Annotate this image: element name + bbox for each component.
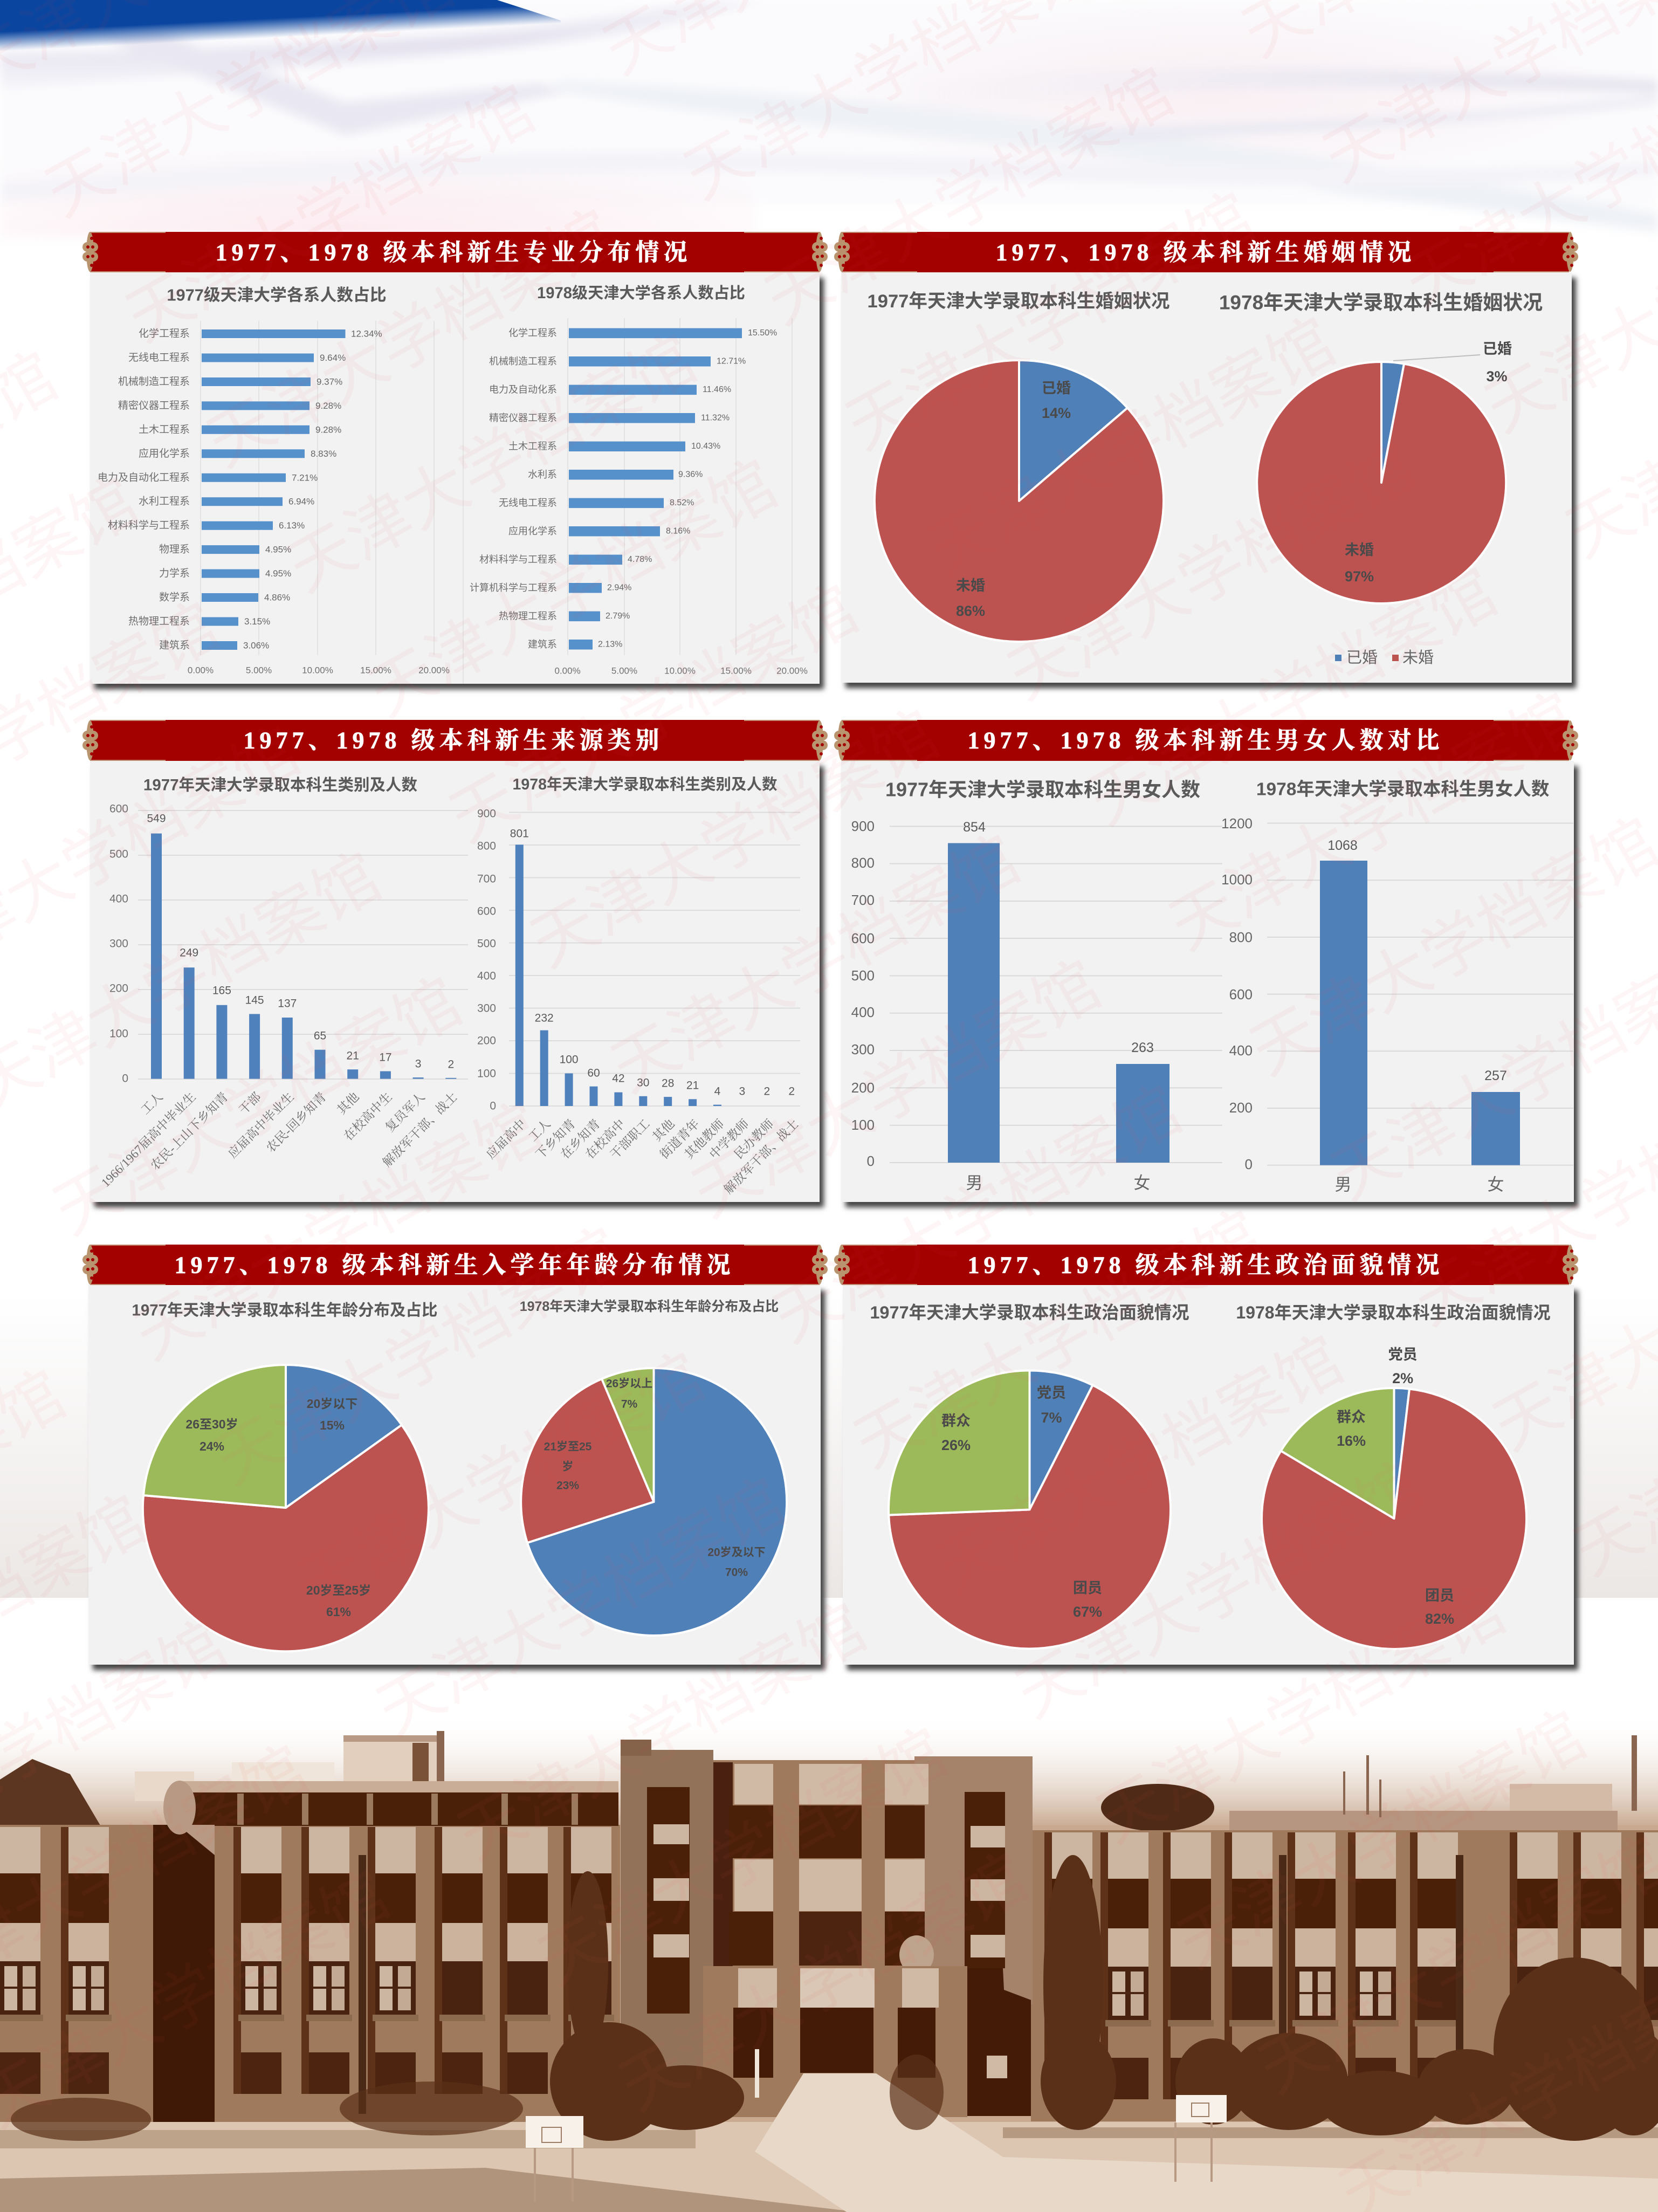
chart: 1977 departments: 应用化学系	[139, 448, 190, 459]
heading: major distribution	[82, 232, 828, 272]
chart: 1978 source columns: 21	[686, 1080, 699, 1091]
chart: 1977 source columns: 1966/1967届高中毕业生	[99, 1090, 198, 1190]
chart: 1977 source columns: 2	[448, 1058, 454, 1071]
chart: 1978 source columns: 应届高中	[484, 1117, 528, 1162]
chart: 1978 marital pie: 已婚	[1483, 341, 1512, 357]
chart: 1978 age pie: 岁	[562, 1460, 574, 1473]
right wing	[1031, 1830, 1658, 2121]
watermark: archive name repeated: 天津大学档案馆	[277, 1326, 718, 1627]
chart: 1978 age pie: 7%	[621, 1398, 637, 1411]
chart: 1977 marital pie	[867, 291, 1170, 642]
heading: source categories	[82, 720, 828, 761]
chart: 1977 source columns: 3	[415, 1058, 421, 1070]
entrance block	[703, 1966, 1033, 2117]
chart: 1978 source columns: 干部职工	[608, 1117, 652, 1162]
chart: 1977 departments: 建筑系	[159, 640, 190, 651]
chart: 1978 age pie: 23%	[556, 1480, 579, 1492]
chart: 1978 departments: 应用化学系	[508, 526, 557, 537]
chart: 1978 source columns: 100	[477, 1068, 496, 1080]
chart: 1977 source columns: 200	[109, 983, 128, 994]
chart: 1978 source columns: 800	[477, 840, 496, 852]
watermark: archive name repeated: 天津大学档案馆	[600, 1826, 1042, 2128]
watermark: archive name repeated: 天津大学档案馆	[673, 933, 1114, 1235]
chart: 1977 source columns: 300	[109, 937, 128, 950]
chart: 1978 source columns: 600	[477, 905, 496, 918]
left wing	[0, 1781, 620, 2127]
background: top swooshes	[0, 1, 1658, 235]
chart: 1978 source columns: 民办教师	[732, 1117, 776, 1162]
chart: 1978 departments: 机械制造工程系	[489, 356, 557, 367]
chart: 1978 gender columns: 257	[1484, 1068, 1507, 1083]
chart: 1978 age pie	[520, 1299, 787, 1636]
heading: age distribution: 1977、1978 级本科新生入学年年龄分布情况	[175, 1252, 734, 1278]
watermark: archive name repeated: 天津大学档案馆	[269, 308, 710, 609]
chart: 1977 source columns: 17	[379, 1052, 392, 1063]
chart: 1977 political pie: 7%	[1041, 1410, 1062, 1426]
chart: 1978 departments: 5.00%	[611, 665, 637, 676]
chart: 1977 departments: 精密仪器工程系	[118, 400, 190, 411]
chart: 1977 departments: 电力及自动化工程系	[98, 471, 190, 483]
chart: 1977 departments: 20.00%	[418, 665, 450, 675]
chart: 1977 political pie: 团员	[1073, 1580, 1102, 1596]
panel: source categories	[82, 720, 828, 1212]
chart: 1977 departments: 9.28%	[315, 424, 341, 435]
chart: 1978 source columns: 42	[612, 1072, 625, 1085]
chart: 1977 gender columns: 男	[966, 1173, 982, 1193]
watermark: archive name repeated: 天津大学档案馆	[988, 416, 1430, 717]
chart: 1978 source columns: 4	[714, 1085, 721, 1098]
chart: 1978 source columns	[477, 776, 801, 1197]
heading: age distribution	[82, 1245, 828, 1285]
watermark: archive name repeated: 天津大学档案馆	[907, 291, 1349, 592]
chart: 1978 departments: 1978级天津大学各系人数占比	[537, 284, 745, 302]
watermark: archive name repeated: 天津大学档案馆	[746, 40, 1187, 342]
chart: 1978 departments: 12.71%	[717, 357, 746, 366]
chart: 1977 departments: 4.86%	[264, 592, 290, 603]
chart: 1977 source columns: 复员军人	[383, 1090, 428, 1135]
chart: 1977 departments: 物理系	[159, 544, 190, 555]
chart: 1977 marital pie: 86%	[956, 603, 985, 619]
panel: major distribution	[82, 232, 828, 693]
watermark: archive name repeated: 天津大学档案馆	[188, 183, 629, 484]
chart: 1977 departments: 6.94%	[288, 497, 314, 507]
chart: 1978 departments: 建筑系	[528, 639, 557, 650]
chart: 1978 departments: 水利系	[528, 469, 557, 480]
chart: 1978 departments: 20.00%	[776, 665, 808, 676]
panel: marital status	[834, 232, 1580, 692]
chart: 1978 marital pie	[1219, 291, 1543, 603]
chart: 1978 departments: 计算机科学与工程系	[470, 582, 557, 593]
chart: 1978 source columns: 28	[662, 1077, 674, 1089]
chart: 1978 departments: 4.78%	[628, 555, 652, 564]
chart: 1978 political pie: 1978年天津大学录取本科生政治面貌情况	[1236, 1303, 1551, 1322]
chart: 1977 departments: 材料科学与工程系	[108, 519, 190, 531]
chart: 1977 source columns: 解放军干部、战士	[380, 1090, 460, 1170]
chart: 1977 departments: 4.95%	[265, 545, 291, 555]
chart: 1978 age pie: 26岁以上	[606, 1377, 652, 1390]
chart: 1978 source columns: 在校高中	[583, 1117, 628, 1162]
chart: 1977 source columns: 其他	[335, 1090, 362, 1117]
chart: 1978 gender columns: 200	[1229, 1100, 1253, 1116]
chart: 1978 departments: 热物理工程系	[499, 611, 557, 622]
chart: 1977 marital pie: 14%	[1042, 405, 1071, 421]
chart: 1978 departments: 2.94%	[607, 583, 631, 592]
chart: 1978 departments: 8.52%	[670, 498, 694, 507]
chart: 1977 departments: 6.13%	[279, 520, 305, 531]
watermark: archive name repeated: 天津大学档案馆	[430, 558, 872, 860]
chart: 1978 departments: 11.32%	[701, 413, 730, 423]
watermark: archive name repeated: 天津大学档案馆	[511, 683, 953, 985]
watermark: archive name repeated: 天津大学档案馆	[107, 58, 548, 359]
chart: 1978 departments	[470, 284, 808, 676]
chart: 1978 gender columns: 1068	[1327, 838, 1358, 853]
chart: 1977 departments: 无线电工程系	[128, 352, 190, 363]
chart: 1978 marital pie: 1978年天津大学录取本科生婚姻状况	[1219, 291, 1543, 314]
chart: 1978 source columns: 400	[477, 970, 496, 983]
watermark: archive name repeated: 天津大学档案馆	[1077, 1559, 1519, 1860]
chart: 1978 source columns: 0	[490, 1100, 496, 1112]
chart: 1978 political pie: 2%	[1392, 1370, 1413, 1386]
chart: 1977 marital pie: 1977年天津大学录取本科生婚姻状况	[867, 291, 1170, 312]
watermark: archive name repeated: 天津大学档案馆	[754, 1059, 1195, 1360]
chart: 1978 source columns: 2	[788, 1085, 795, 1098]
chart: 1977 age pie: 61%	[326, 1605, 351, 1619]
chart: 1978 source columns: 其他教师	[682, 1117, 727, 1162]
chart: 1977 source columns: 干部	[237, 1090, 264, 1117]
chart: 1978 departments: 材料科学与工程系	[479, 554, 557, 565]
chart: 1977 political pie: 群众	[941, 1413, 971, 1429]
chart: 1977 departments: 9.64%	[320, 353, 346, 363]
trees and skyline behind building	[0, 1731, 1637, 1832]
chart: 1977 gender columns: 263	[1131, 1040, 1154, 1055]
chart: 1977 departments: 7.21%	[292, 472, 318, 483]
watermark: archive name repeated: 天津大学档案馆	[196, 1201, 637, 1502]
ground and path	[0, 2073, 1658, 2212]
chart: 1977 political pie: 26%	[941, 1437, 971, 1453]
chart: 1977 age pie: 24%	[199, 1439, 224, 1453]
panel: gender comparison	[834, 720, 1583, 1212]
chart: 1978 political pie: 82%	[1425, 1611, 1454, 1627]
chart: 1977 departments: 力学系	[159, 567, 190, 579]
chart: 1978 political pie: 党员	[1388, 1347, 1418, 1363]
heading: source categories: 1977、1978 级本科新生来源类别	[244, 727, 663, 754]
chart: 1977 gender columns: 600	[851, 930, 875, 946]
watermark: archive name repeated: 天津大学档案馆	[115, 1076, 556, 1377]
chart: 1977 departments: 0.00%	[188, 665, 214, 675]
chart: 1977 age pie: 20岁至25岁	[306, 1583, 371, 1597]
chart: 1978 gender columns: 1000	[1221, 871, 1253, 888]
chart: 1978 departments: 15.50%	[748, 328, 777, 338]
chart: 1977 source columns: 100	[109, 1028, 128, 1040]
panel: age distribution	[82, 1245, 829, 1674]
chart: 1978 age pie: 1978年天津大学录取本科生年龄分布及占比	[520, 1299, 779, 1314]
watermark: archive name repeated: 天津大学档案馆	[438, 1576, 880, 1878]
watermark: archive name repeated: 天津大学档案馆	[519, 1701, 961, 2003]
chart: 1977 political pie: 67%	[1073, 1604, 1102, 1620]
chart: 1978 departments: 10.00%	[664, 665, 696, 676]
watermark: archive name repeated: 天津大学档案馆	[827, 166, 1268, 467]
chart: 1977 departments: 3.15%	[244, 616, 270, 627]
chart: 1977 gender columns: 800	[851, 855, 875, 871]
heading: gender comparison	[834, 720, 1578, 761]
heading: political affiliation: 1977、1978 级本科新生政治面貌情况	[967, 1252, 1444, 1278]
chart: 1978 source columns: 300	[477, 1002, 496, 1015]
chart: 1977 political pie: 党员	[1037, 1385, 1066, 1401]
chart: 1978 political pie	[1236, 1303, 1551, 1649]
chart: 1977 source columns: 应届高中毕业生	[225, 1090, 297, 1161]
chart: 1977 departments: 9.37%	[317, 376, 342, 387]
chart: 1977 age pie: 20岁以下	[307, 1397, 357, 1411]
chart: 1978 departments: 电力及自动化系	[489, 384, 557, 395]
chart: 1978 political pie: 团员	[1425, 1588, 1454, 1604]
chart: 1978 source columns: 中学教师	[707, 1117, 752, 1162]
legend: marital status: 未婚	[1402, 649, 1434, 667]
chart: 1977 source columns: 在校高中生	[341, 1090, 395, 1143]
chart: 1978 gender columns: 800	[1229, 929, 1253, 945]
heading: political affiliation	[834, 1245, 1578, 1285]
central tower block	[621, 1740, 1033, 2117]
watermark: archive name repeated: 天津大学档案馆	[357, 1451, 799, 1753]
chart: 1977 departments: 1977级天津大学各系人数占比	[167, 286, 387, 304]
chart: 1977 source columns: 400	[109, 893, 128, 905]
chart: 1978 gender columns: 1978年天津大学录取本科生男女人数	[1256, 780, 1549, 799]
chart: 1977 gender columns: 900	[851, 818, 875, 834]
chart: 1977 gender columns: 854	[963, 820, 986, 835]
chart: 1977 age pie: 1977年天津大学录取本科生年龄分布及占比	[132, 1302, 438, 1319]
chart: 1977 source columns: 137	[278, 998, 297, 1009]
chart: 1978 marital pie: 3%	[1486, 368, 1508, 384]
chart: 1977 gender columns: 1977年天津大学录取本科生男女人数	[885, 779, 1200, 800]
legend: marital status	[1335, 649, 1434, 667]
chart: 1977 age pie: 15%	[320, 1418, 345, 1432]
basketball hoops	[526, 2049, 1227, 2202]
watermark: archive name repeated: 天津大学档案馆	[1150, 666, 1592, 967]
watermark: archive name repeated: 天津大学档案馆	[835, 1184, 1276, 1485]
chart: 1977 gender columns: 200	[851, 1080, 875, 1096]
chart: 1978 source columns: 500	[477, 937, 496, 950]
chart: 1977 departments: 5.00%	[246, 665, 272, 675]
chart: 1978 departments: 8.16%	[666, 526, 690, 536]
chart: 1978 departments: 0.00%	[554, 665, 581, 676]
chart: 1977 gender columns: 400	[851, 1004, 875, 1020]
watermark: archive name repeated: 天津大学档案馆	[592, 808, 1034, 1110]
chart: 1977 departments: 数学系	[159, 591, 190, 603]
heading: marital status: 1977、1978 级本科新生婚姻情况	[995, 239, 1416, 265]
chart: 1977 source columns: 249	[180, 947, 198, 959]
chart: 1978 source columns: 200	[477, 1034, 496, 1047]
trees in front of building	[11, 1855, 1658, 2141]
watermark: archive name repeated: 天津大学档案馆	[34, 951, 476, 1252]
chart: 1978 source columns: 街道青年	[657, 1117, 702, 1162]
chart: 1977 marital pie: 已婚	[1042, 380, 1071, 396]
chart: 1977 departments: 12.34%	[351, 329, 382, 339]
chart: 1978 departments: 化学工程系	[508, 328, 557, 339]
chart: 1977 political pie	[870, 1303, 1189, 1648]
heading: major distribution: 1977、1978 级本科新生专业分布情况	[216, 239, 691, 265]
chart: 1977 marital pie: 未婚	[956, 578, 985, 594]
chart: 1978 gender columns: 0	[1245, 1156, 1253, 1172]
chart: 1977 source columns: 21	[347, 1049, 359, 1062]
chart: 1977 gender columns: 500	[851, 967, 875, 984]
chart: 1977 source columns: 农民-回乡知青	[264, 1090, 329, 1155]
chart: 1977 departments: 9.28%	[315, 401, 341, 411]
chart: 1978 departments: 无线电工程系	[499, 498, 557, 509]
chart: 1978 departments: 11.46%	[703, 385, 731, 394]
chart: 1978 gender columns: 男	[1335, 1176, 1351, 1194]
chart: 1978 source columns: 在乡知青	[558, 1117, 603, 1162]
chart: 1977 departments: 8.83%	[311, 449, 336, 459]
watermark: archive name repeated: 天津大学档案馆	[1158, 1684, 1600, 1986]
chart: 1977 source columns: 600	[109, 802, 128, 815]
chart: 1978 gender columns: 1200	[1221, 815, 1253, 832]
chart: 1977 source columns	[99, 777, 468, 1190]
heading: gender comparison: 1977、1978 级本科新生男女人数对比	[967, 727, 1444, 754]
chart: 1978 source columns: 60	[587, 1067, 600, 1080]
chart: 1977 departments: 热物理工程系	[128, 615, 190, 627]
chart: 1977 source columns: 1977年天津大学录取本科生类别及人数	[143, 777, 417, 794]
chart: 1978 source columns: 700	[477, 873, 496, 885]
chart: 1978 age pie: 70%	[725, 1566, 748, 1579]
chart: 1978 source columns: 1978年天津大学录取本科生类别及人数	[513, 776, 777, 793]
chart: 1978 age pie: 20岁及以下	[707, 1547, 766, 1558]
chart: 1977 departments: 化学工程系	[139, 328, 190, 340]
chart: 1977 departments: 3.06%	[243, 641, 269, 650]
chart: 1977 source columns: 工人	[139, 1090, 166, 1117]
chart: 1977 gender columns: 700	[851, 892, 875, 908]
chart: 1977 source columns: 500	[109, 848, 128, 861]
chart: 1978 source columns: 3	[739, 1085, 745, 1098]
chart: 1978 source columns: 30	[637, 1076, 649, 1089]
chart: 1977 departments: 机械制造工程系	[118, 375, 190, 387]
chart: 1977 gender columns: 100	[851, 1117, 875, 1133]
chart: 1977 source columns: 145	[245, 994, 264, 1006]
chart: 1978 source columns: 下乡知青	[533, 1117, 578, 1162]
chart: 1977 source columns: 农民-上山下乡知青	[148, 1090, 231, 1172]
chart: 1977 departments: 10.00%	[302, 665, 333, 675]
chart: 1978 gender columns	[1221, 780, 1573, 1194]
chart: 1978 departments: 9.36%	[678, 470, 703, 479]
chart: 1978 departments: 土木工程系	[508, 441, 557, 452]
watermark: archive name repeated: 天津大学档案馆	[996, 1434, 1438, 1735]
chart: 1977 departments: 土木工程系	[139, 423, 190, 435]
chart: 1977 source columns: 65	[314, 1030, 326, 1042]
chart: 1978 marital pie: 未婚	[1345, 542, 1374, 558]
heading: marital status	[834, 232, 1578, 272]
chart: 1978 gender columns: 600	[1229, 986, 1253, 1002]
decoration: blue swoosh corner	[0, 0, 561, 51]
chart: 1977 gender columns: 0	[867, 1153, 875, 1169]
chart: 1978 source columns: 解放军干部、战士	[721, 1117, 801, 1197]
chart: 1978 departments: 2.79%	[606, 612, 630, 621]
chart: 1978 departments: 精密仪器工程系	[489, 413, 557, 423]
chart: 1977 age pie: 26至30岁	[185, 1417, 238, 1431]
watermark: archive name repeated: 天津大学档案馆	[349, 433, 791, 734]
chart: 1978 departments: 10.43%	[691, 442, 720, 451]
chart: 1977 departments	[98, 286, 450, 675]
chart: 1978 source columns: 100	[560, 1054, 579, 1066]
chart: 1978 source columns: 232	[535, 1012, 554, 1025]
chart: 1977 gender columns: 300	[851, 1041, 875, 1057]
chart: 1978 source columns: 工人	[526, 1117, 553, 1144]
watermark: archive name repeated: 天津大学档案馆	[916, 1309, 1357, 1610]
legend: marital status: 已婚	[1346, 649, 1378, 667]
chart: 1978 gender columns: 女	[1487, 1176, 1504, 1194]
chart: 1978 source columns: 其他	[650, 1117, 677, 1144]
chart: 1977 source columns: 165	[212, 985, 231, 997]
chart: 1977 departments: 15.00%	[360, 665, 391, 675]
chart: 1977 source columns: 549	[147, 812, 166, 825]
chart: 1978 political pie: 群众	[1337, 1409, 1366, 1425]
chart: 1978 gender columns: 400	[1229, 1042, 1253, 1059]
chart: 1978 political pie: 16%	[1337, 1433, 1366, 1449]
chart: 1977 departments: 4.95%	[265, 568, 291, 579]
panel: political affiliation	[834, 1245, 1583, 1674]
chart: 1977 gender columns: 女	[1133, 1173, 1151, 1193]
chart: 1978 source columns: 2	[763, 1085, 770, 1098]
chart: 1977 political pie: 1977年天津大学录取本科生政治面貌情况	[870, 1303, 1189, 1322]
chart: 1978 source columns: 900	[477, 808, 496, 820]
chart: 1977 age pie	[132, 1302, 438, 1651]
chart: 1978 departments: 15.00%	[720, 665, 752, 676]
background: lower grey band	[0, 1294, 1658, 1598]
watermark: archive name repeated: 天津大学档案馆	[1069, 541, 1511, 842]
chart: 1978 source columns: 801	[510, 827, 529, 840]
photo: sepia campus building	[0, 1731, 1658, 2212]
chart: 1978 age pie: 21岁至25	[544, 1441, 592, 1453]
chart: 1978 marital pie: 97%	[1345, 568, 1374, 585]
chart: 1977 gender columns	[851, 779, 1222, 1193]
chart: 1977 source columns: 0	[122, 1072, 128, 1085]
chart: 1978 departments: 2.13%	[598, 640, 622, 649]
chart: 1977 departments: 水利工程系	[139, 496, 190, 507]
